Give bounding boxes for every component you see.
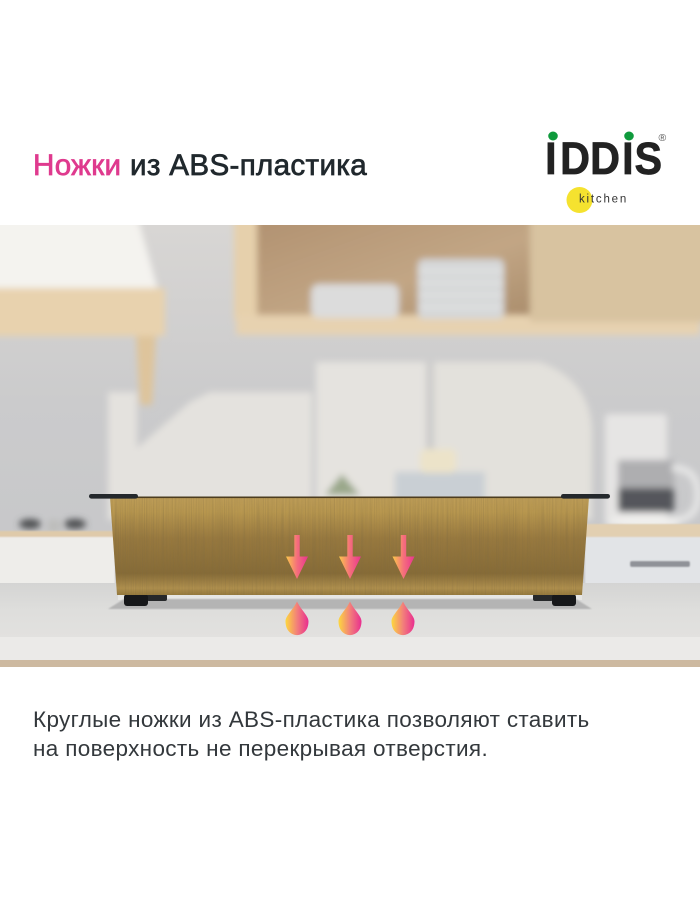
- description text: Круглые ножки из ABS-пластика позволяют ставить: [33, 707, 590, 732]
- coffee machine: [605, 414, 667, 526]
- description text: на поверхность не перекрывая отверстия.: [33, 736, 488, 761]
- logo green dot left: [548, 132, 558, 140]
- wall shelf cabinet: [240, 215, 532, 320]
- white appliances on counter: [108, 392, 312, 520]
- logo wordmark: D: [560, 134, 590, 184]
- right counter and drawer: [585, 524, 700, 537]
- arrow 2: [339, 535, 361, 579]
- logo registered mark: ®: [658, 132, 666, 144]
- brass sink body: [110, 497, 589, 595]
- plates: [311, 284, 399, 318]
- logo kitchen word: kitchen: [579, 194, 628, 206]
- countertop: [0, 583, 700, 667]
- logo wordmark: D: [590, 134, 620, 184]
- arrows and drops: [286, 535, 414, 635]
- arrow 3: [392, 535, 414, 579]
- drop 1: [286, 602, 308, 635]
- sink rim: [89, 494, 610, 499]
- drop 3: [392, 602, 414, 635]
- logo wordmark: I: [545, 134, 557, 184]
- light strip under sink: [118, 595, 582, 600]
- logo green dot right: [624, 132, 634, 140]
- sink shadow: [108, 599, 592, 609]
- sink feet: [124, 594, 576, 606]
- arrow 1: [286, 535, 308, 579]
- plant and toaster: [325, 474, 360, 495]
- logo wordmark: I: [622, 134, 634, 184]
- blurred kitchen background: [0, 215, 700, 667]
- description text: [33, 707, 590, 761]
- logo wordmark: S: [635, 134, 662, 184]
- title: Ножки из ABS-пластика: [33, 149, 367, 182]
- left stove and cabinet: [19, 519, 41, 529]
- logo: IDDIS kitchen: [545, 132, 666, 213]
- logo yellow circle: [566, 187, 592, 213]
- range hood: [0, 215, 158, 290]
- drop 2: [338, 602, 362, 635]
- kitchen photo with sink: [0, 225, 700, 667]
